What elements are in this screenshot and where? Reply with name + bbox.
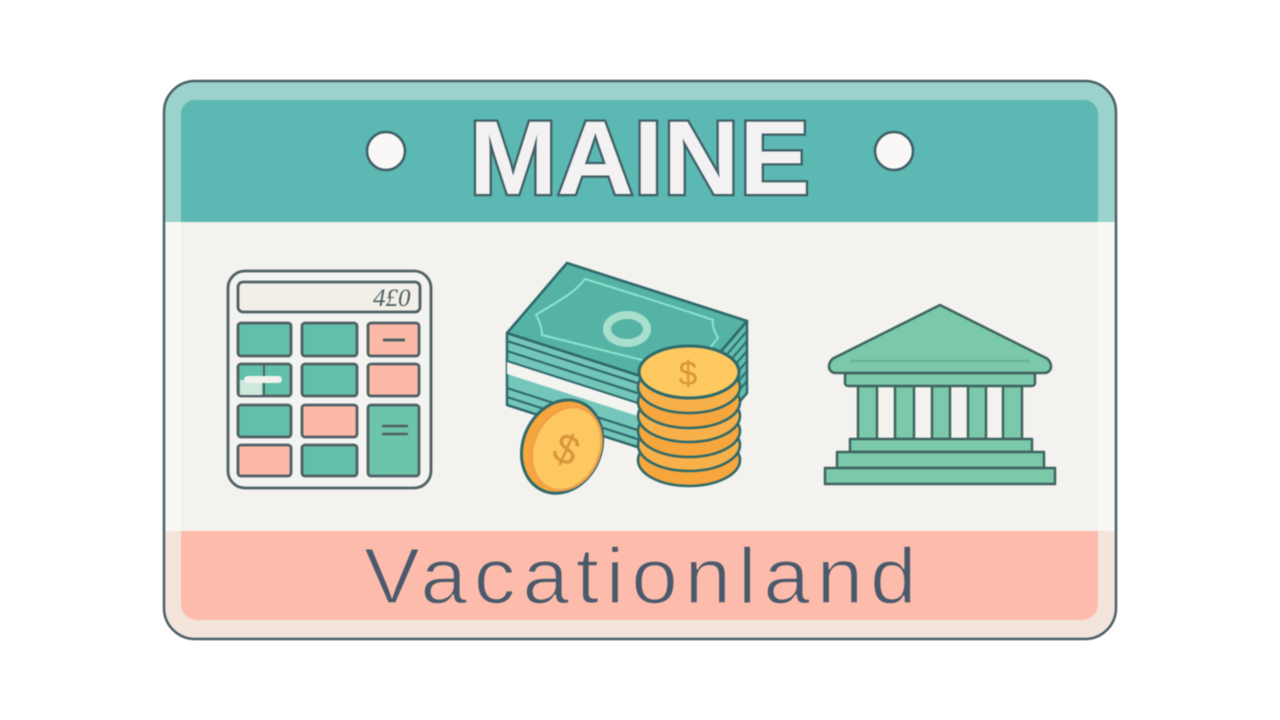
icon: calculator (228, 271, 431, 488)
bank steps (825, 439, 1055, 484)
left bolt hole (367, 132, 405, 170)
bank roof shading (850, 360, 1030, 362)
license plate (160, 78, 1120, 643)
icon: money and coins (507, 263, 747, 506)
calculator display: 4£0 (373, 285, 411, 312)
bank entablature (845, 373, 1035, 386)
coin stack: $ (679, 355, 698, 393)
plate outline (164, 81, 1116, 639)
single coin (507, 387, 617, 506)
banknote stack (507, 263, 747, 463)
title: MAINE (469, 100, 810, 217)
coin stack (638, 346, 740, 486)
single coin: $ (546, 423, 587, 475)
plate base (164, 81, 1116, 639)
bank columns (858, 386, 1022, 439)
calculator button symbols (240, 340, 408, 434)
calculator display (238, 282, 420, 312)
calculator buttons (238, 323, 419, 476)
top band (160, 78, 1120, 643)
right bolt hole (875, 132, 913, 170)
slogan: Vacationland (364, 532, 923, 620)
icon: bank building (825, 305, 1055, 484)
bank roof (829, 305, 1051, 373)
